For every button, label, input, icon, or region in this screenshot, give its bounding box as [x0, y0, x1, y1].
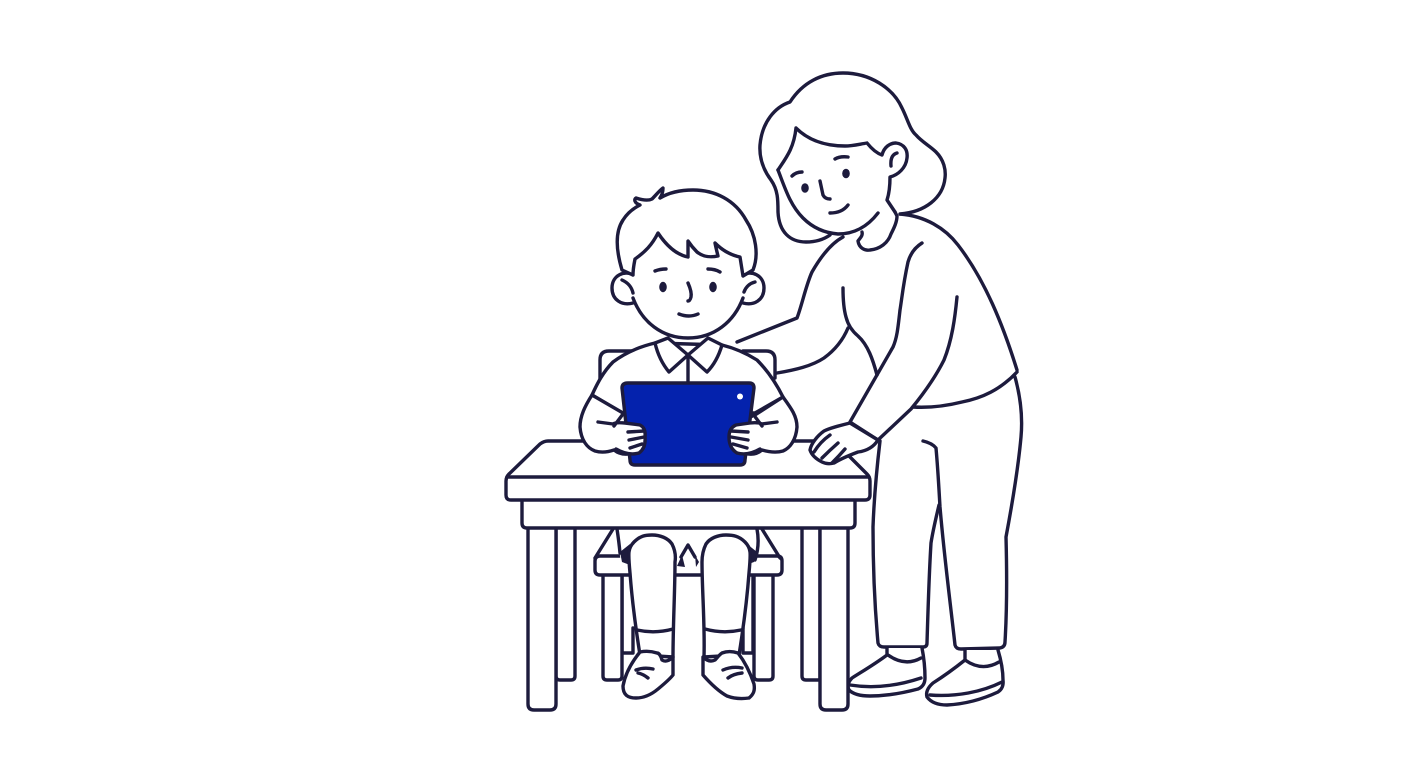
woman face — [778, 128, 907, 234]
woman right shoe — [927, 650, 1003, 705]
left leg — [629, 535, 675, 657]
child arms — [580, 395, 797, 454]
child right hand — [729, 414, 777, 454]
child figure — [580, 188, 797, 465]
woman front arm — [850, 243, 957, 440]
woman hair — [760, 73, 945, 242]
child left hand — [598, 414, 645, 454]
child hair — [617, 188, 756, 276]
left shoe — [623, 651, 673, 698]
child ears — [612, 273, 764, 304]
child face — [622, 250, 755, 338]
child collar — [655, 338, 722, 383]
chair — [595, 529, 782, 680]
child shorts and legs — [617, 529, 758, 699]
woman figure — [737, 73, 1022, 705]
woman torso and sweater — [843, 214, 1017, 407]
woman back arm — [737, 237, 848, 373]
woman collar — [858, 212, 897, 250]
right leg — [702, 535, 750, 657]
chair back — [600, 351, 775, 380]
woman hand on desk — [810, 423, 878, 464]
woman left shoe — [848, 648, 925, 696]
right shoe — [703, 652, 754, 699]
child shirt — [592, 343, 783, 413]
tablet — [622, 383, 754, 465]
desk rear legs — [556, 526, 820, 680]
woman trousers — [873, 377, 1022, 649]
desk front legs — [528, 526, 848, 710]
desk top — [506, 441, 870, 528]
